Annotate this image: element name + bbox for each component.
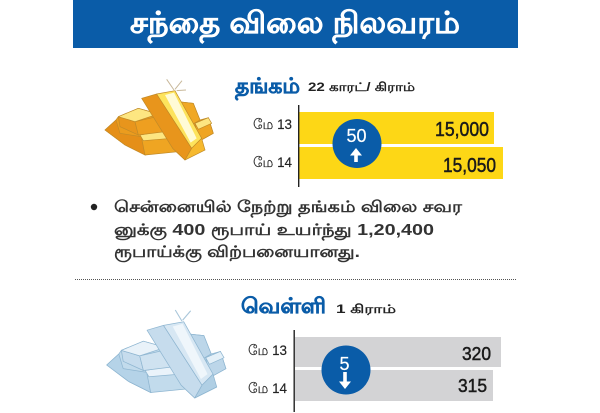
unit: per gram: 1 கிராம் — [336, 302, 396, 316]
panel: gold — [91, 75, 503, 263]
text: gold price note — [91, 199, 463, 263]
bar chart: silver price: 315 — [458, 376, 487, 396]
heading: gold: தங்கம் — [235, 75, 300, 101]
heading: silver: வெள்ளி — [241, 295, 326, 318]
title banner: சந்தை விலை நிலவரம் — [130, 7, 460, 44]
date labels: மே 14 — [248, 380, 287, 396]
title banner — [73, 0, 518, 48]
text: gold price note: ரூபாய்க்கு விற்பனையானது. — [114, 244, 360, 263]
date labels — [248, 342, 287, 396]
text: gold price note: சென்னையில் நேற்று தங்கம் விலை சவர — [114, 199, 463, 217]
bar chart: silver price: 320 — [462, 344, 491, 364]
date labels — [253, 116, 292, 170]
badge: down 5: 5 — [339, 354, 350, 374]
panel: silver — [107, 295, 501, 412]
bar chart: gold price: 15,000 — [435, 119, 489, 141]
badge: up 50 — [332, 119, 382, 168]
text: gold price note: னுக்கு 400 ரூபாய் உயர்ந்து 1,20,400 — [114, 222, 434, 241]
date labels: மே 14 — [253, 154, 292, 170]
bar chart: gold price — [298, 105, 503, 187]
date labels: மே 13 — [248, 342, 287, 358]
badge: down 5 — [322, 346, 370, 394]
bar chart: gold price: 15,050 — [443, 155, 496, 177]
date labels: மே 13 — [253, 116, 292, 132]
icon: gold bars — [105, 79, 213, 160]
unit: 22 carat per gram: 22 காரட்/ கிராம் — [308, 80, 415, 94]
bar chart: silver price — [294, 330, 501, 412]
icon: silver bars — [107, 310, 226, 398]
badge: up 50: 50 — [346, 126, 367, 146]
